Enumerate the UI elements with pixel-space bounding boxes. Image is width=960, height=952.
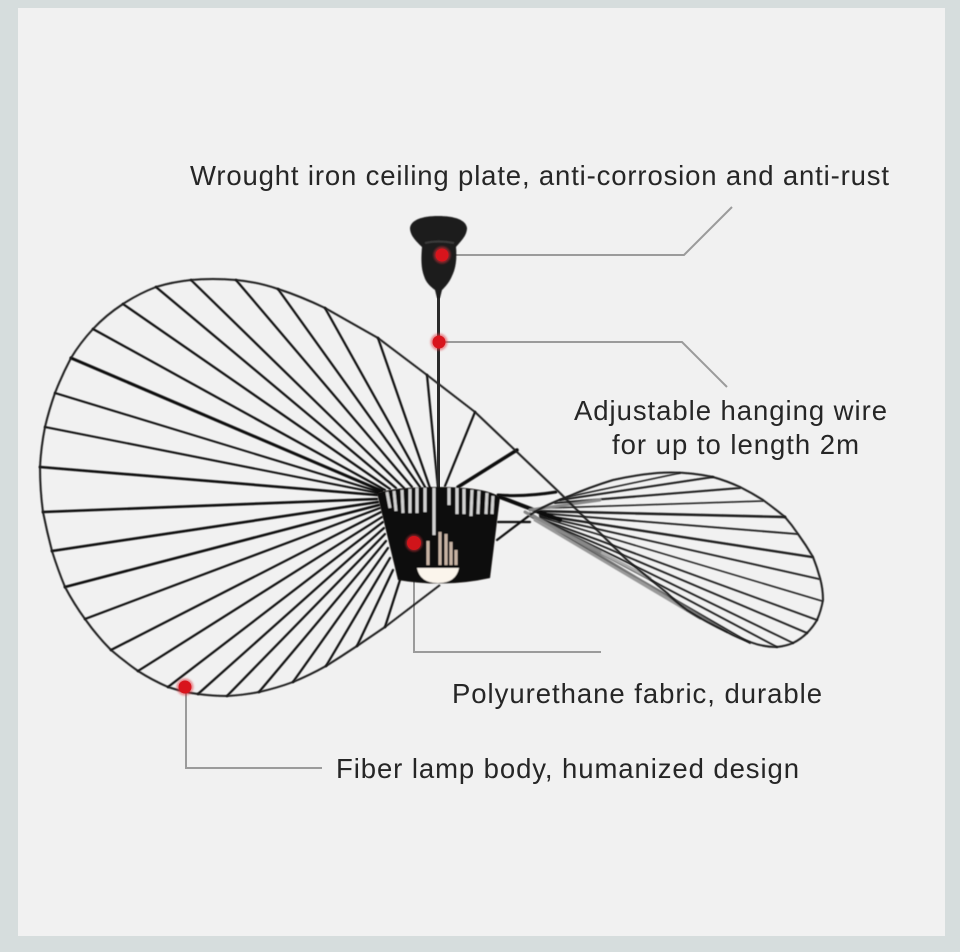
shade lower warm stripes [428,532,456,565]
shade upper light stripes [387,488,493,535]
label: hanging wire [574,395,887,460]
red marker: ceiling plate [434,246,450,264]
label: ceiling plate: Wrought iron ceiling plate, anti-corrosion and anti-rust [190,160,889,191]
lamp shade [377,487,500,584]
label: hanging wire: for up to length 2m [612,429,859,460]
red marker: hanging wire [430,334,448,350]
lamp brim: left lobe ribs [40,280,556,696]
label: hanging wire: Adjustable hanging wire [574,395,887,426]
lamp brim: outer rim [40,279,823,696]
label: fabric: Polyurethane fabric, durable [452,678,822,709]
light bulb [417,568,459,583]
lamp brim: right lobe ribs [500,473,822,647]
red marker: lamp shade [406,534,422,552]
ceiling plate [410,216,467,298]
red marker: lamp body [176,678,194,696]
label: lamp body: Fiber lamp body, humanized design [336,753,799,784]
hanging wire [437,290,440,492]
callout leader lines [186,207,732,768]
